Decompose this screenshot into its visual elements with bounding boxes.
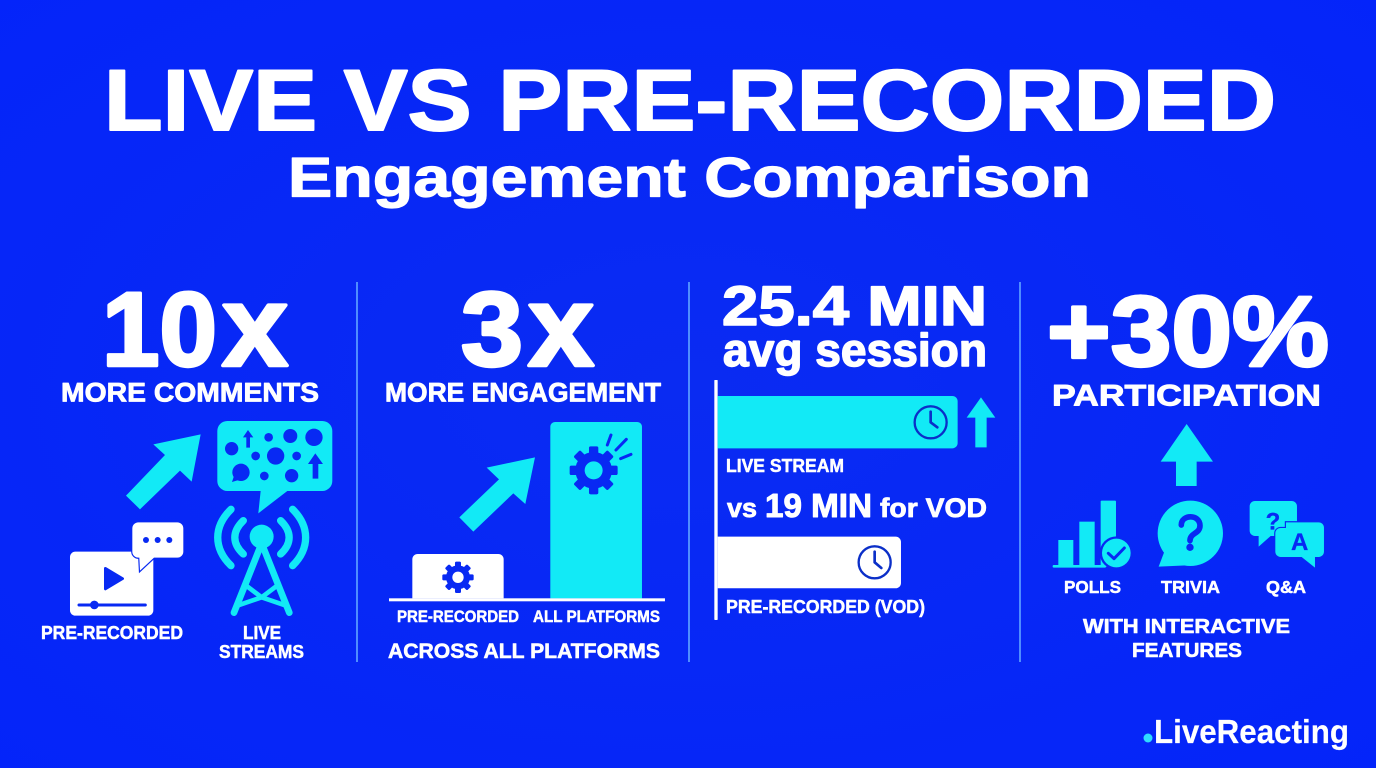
stat: +30%: +30% <box>1047 276 1329 386</box>
label: live streams: STREAMS <box>219 641 304 662</box>
icon: q and a: A <box>1291 529 1308 556</box>
icon: trivia <box>1158 501 1223 567</box>
label: live stream: LIVE STREAM <box>726 455 844 476</box>
bar: pre-recorded <box>412 554 504 598</box>
icon: large gear <box>570 435 631 494</box>
label: live streams <box>219 622 304 662</box>
icon: broadcast tower <box>218 509 306 613</box>
icon: q and a <box>1250 501 1324 568</box>
panel: session length <box>714 274 995 620</box>
bar chart: engagement <box>389 422 665 601</box>
icon: polls <box>1053 501 1133 570</box>
comparison: 19 min for vod <box>727 487 987 524</box>
label: all platforms: ALL PLATFORMS <box>533 608 660 626</box>
label: q and a: Q&A <box>1266 577 1306 597</box>
heading: avg session: avg session <box>723 324 987 376</box>
icon: clock vod <box>859 546 891 578</box>
label: polls: POLLS <box>1064 577 1121 597</box>
caption: with interactive features: FEATURES <box>1132 639 1242 662</box>
arrow: growth <box>459 457 535 532</box>
heading: more engagement: MORE ENGAGEMENT <box>385 378 661 408</box>
bar: pre-recorded <box>718 537 901 588</box>
comparison: 19 min for vod: for VOD <box>880 493 987 523</box>
title <box>104 53 1276 208</box>
comparison: 19 min for vod: vs <box>727 493 757 523</box>
icon: live comment bubble <box>217 421 332 513</box>
label: trivia: TRIVIA <box>1161 577 1220 597</box>
label: pre-recorded: PRE-RECORDED <box>397 608 519 626</box>
stat: 10x: 10 <box>102 272 217 388</box>
icon: clock live <box>915 406 947 438</box>
subtitle: Engagement Comparison <box>288 146 1091 208</box>
caption: with interactive features <box>1083 615 1290 662</box>
icon: pre-recorded video <box>70 522 183 616</box>
stat: 3x: 3 <box>461 272 523 388</box>
title: LIVE VS PRE-RECORDED <box>104 53 1276 149</box>
label: live streams: LIVE <box>243 622 281 643</box>
heading: participation: PARTICIPATION <box>1052 380 1321 412</box>
heading: more comments: MORE COMMENTS <box>61 378 319 408</box>
stat: 25.4 min: 25.4 MIN <box>722 274 987 337</box>
panel: comments <box>41 264 332 662</box>
stat: 3x: x <box>528 264 594 390</box>
label: pre-recorded: PRE-RECORDED <box>41 622 183 643</box>
arrow: up <box>1161 424 1213 486</box>
stat: 10x: x <box>222 264 288 390</box>
bar chart: session <box>714 380 995 620</box>
panel: engagement <box>385 264 665 663</box>
panel: participation <box>1047 276 1329 662</box>
stat: 10x <box>102 264 288 390</box>
caption: with interactive features: WITH INTERACTIVE <box>1083 615 1290 638</box>
arrow: growth <box>126 434 201 509</box>
icon: q and a: ? <box>1266 508 1280 535</box>
comparison: 19 min for vod: 19 MIN <box>765 487 872 524</box>
bar: all platforms <box>550 422 642 598</box>
icon: small gear <box>442 562 474 593</box>
caption: across all platforms: ACROSS ALL PLATFORMS <box>388 639 660 663</box>
arrow: up <box>967 397 995 447</box>
bar: live stream <box>718 396 958 448</box>
logo: LiveReacting: LiveReacting <box>1154 713 1349 750</box>
label: pre-recorded vod: PRE-RECORDED (VOD) <box>726 596 925 617</box>
stat: 3x <box>461 264 594 390</box>
